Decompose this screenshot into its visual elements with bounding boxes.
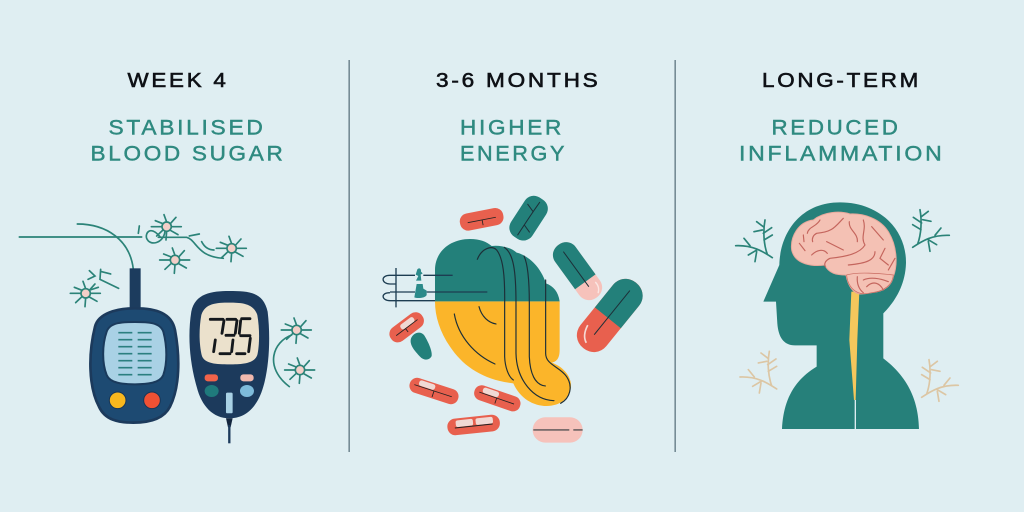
brain [791,212,896,294]
connector lines [383,268,487,307]
head shape: gold lower half [435,301,571,406]
icon: tan branch left [740,351,777,393]
pill: red lower middle [472,383,523,413]
subheading: reduced inflammation [739,116,944,166]
heading: week 4: WEEK 4 [128,69,228,92]
subheading: stabilised blood sugar: STABILISED [108,116,266,140]
icon: tan branch right [922,360,958,401]
panel: week 4 [19,69,315,443]
pill: red lower left [408,376,460,406]
divider right [674,60,676,452]
panel: long-term [736,69,958,429]
heading: long-term: LONG-TERM [762,69,921,92]
subheading: higher energy [460,116,567,166]
sensor wire [19,224,292,387]
panel: 3-6 months [383,69,649,443]
icon: teal branch right [913,210,949,251]
subheading: higher energy: ENERGY [460,142,567,166]
icon: neurons [70,215,315,383]
capsule: teal and red large [570,272,649,359]
subheading: stabilised blood sugar: BLOOD SUGAR [90,142,286,166]
capsule: teal top [505,192,552,245]
small teal glyph [414,268,427,298]
capsule: teal and pink [548,237,607,305]
pill: teal small [411,333,432,360]
head silhouette [763,202,919,429]
meter: right device [189,291,269,443]
meter: left device [90,268,178,423]
illustration: head silhouette with brain [736,202,958,429]
head contour lines [454,247,570,403]
head shape: teal upper half [435,239,560,301]
heading: 3-6 months: 3-6 MONTHS [436,69,600,92]
capsule: red top [458,207,505,232]
pill: red bottom [447,414,501,436]
illustration: head, capsules and pills [383,192,649,443]
subheading: reduced inflammation: REDUCED [772,116,900,140]
subheading: stabilised blood sugar [90,116,286,166]
subheading: higher energy: HIGHER [460,116,564,140]
spinal cord [849,292,859,400]
subheading: reduced inflammation: INFLAMMATION [739,142,944,166]
pill: pink [533,417,583,443]
illustration: glucose meters and neurons [19,215,315,443]
display reading [210,319,250,354]
pill: red left [386,309,427,346]
divider left [348,60,350,452]
icon: teal branch left [736,220,772,262]
